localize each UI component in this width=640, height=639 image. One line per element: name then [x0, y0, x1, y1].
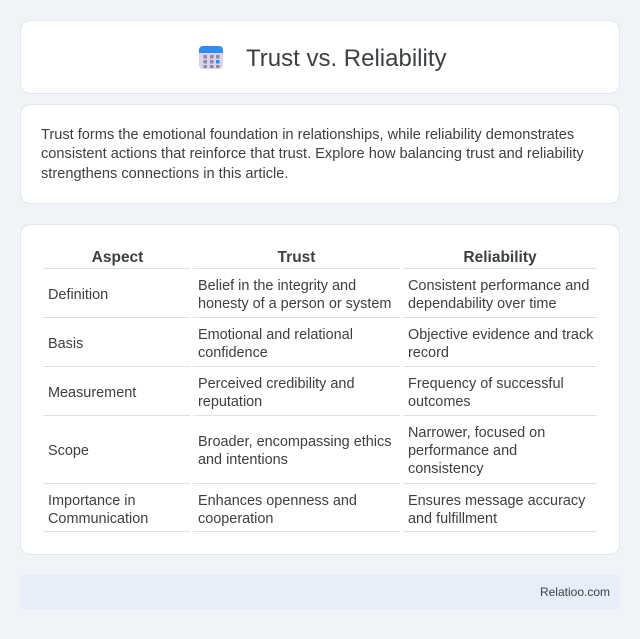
row: Importance in Communication: Communication: [48, 511, 148, 527]
row: Basis: confidence: [198, 345, 268, 361]
column heading: Trust: Trust: [278, 249, 315, 266]
row: Scope: [48, 425, 545, 477]
row: Scope: and intentions: [198, 452, 288, 468]
row: Basis: Objective evidence and track: [408, 327, 593, 343]
row: Scope: Broader, encompassing ethics: [198, 434, 391, 450]
row: Scope: Scope: [48, 443, 89, 459]
row: Basis: [48, 327, 594, 361]
row: Definition: honesty of a person or system: [198, 296, 391, 312]
row: Importance in Communication: cooperation: [198, 511, 273, 527]
row: Measurement: [48, 376, 564, 410]
title: Trust vs. Reliability: [246, 45, 446, 72]
row: Measurement: Frequency of successful: [408, 376, 564, 392]
icon: calendar: [199, 46, 223, 69]
row: Importance in Communication: Importance in: [48, 493, 135, 509]
row: Scope: consistency: [408, 461, 483, 477]
intro text: Trust forms the emotional foundation in relationships, while reliability demonstrates: [41, 126, 574, 142]
row: Importance in Communication: [48, 493, 586, 527]
footer credit: Relatioo.com: [540, 585, 610, 599]
footer bar: [20, 575, 620, 609]
column heading: Reliability: Reliability: [463, 249, 537, 266]
row: Basis: Basis: [48, 336, 83, 352]
row: Importance in Communication: Enhances openness and: [198, 493, 357, 509]
intro text: [41, 126, 584, 182]
intro text: strengthens connections in this article.: [41, 166, 288, 182]
row: Definition: Definition: [48, 287, 108, 303]
row: Scope: performance and: [408, 443, 517, 459]
row: Measurement: Perceived credibility and: [198, 376, 354, 392]
row: Measurement: reputation: [198, 394, 262, 410]
row: Importance in Communication: Ensures message accuracy: [408, 493, 585, 509]
row: Definition: dependability over time: [408, 296, 556, 312]
row: Measurement: Measurement: [48, 385, 136, 401]
table panel: [20, 224, 620, 555]
row: Basis: record: [408, 345, 449, 361]
intro panel: [20, 104, 620, 204]
column heading: Aspect: Aspect: [92, 249, 143, 266]
row: Importance in Communication: and fulfillment: [408, 511, 497, 527]
header panel: [20, 20, 620, 94]
intro text: consistent actions that reinforce that trust. Explore how balancing trust and reliability: [41, 146, 584, 162]
row: Scope: Narrower, focused on: [408, 425, 545, 441]
row: Definition: Belief in the integrity and: [198, 278, 356, 294]
row: Basis: Emotional and relational: [198, 327, 353, 343]
row: Definition: Consistent performance and: [408, 278, 589, 294]
row: Measurement: outcomes: [408, 394, 471, 410]
row: Definition: [48, 278, 589, 312]
